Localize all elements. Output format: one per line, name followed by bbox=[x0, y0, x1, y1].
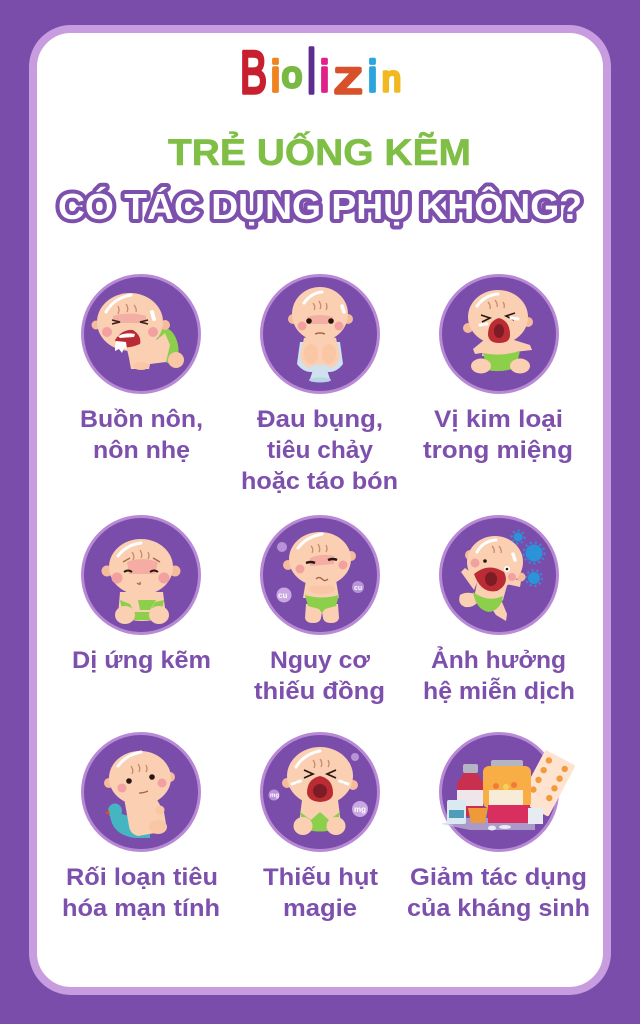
item 1: nausea: nôn nhẹ bbox=[93, 437, 190, 464]
label: Nguy cơ bbox=[270, 647, 371, 674]
icon: running baby with germs bbox=[440, 516, 558, 634]
item 5: copper deficiency bbox=[254, 516, 385, 705]
label: Thiếu hụt bbox=[263, 864, 378, 891]
icon: baby with copper bubbles bbox=[262, 516, 378, 634]
logo: Biolizin: i bbox=[271, 52, 280, 101]
label: Buồn nôn, bbox=[80, 406, 203, 433]
item 4: zinc allergy bbox=[72, 516, 211, 674]
item 5: copper deficiency: thiếu đồng bbox=[254, 678, 385, 705]
label: Vị kim loại bbox=[434, 406, 563, 433]
title line 1: TRẺ UỐNG KẼM bbox=[168, 131, 471, 173]
label: Dị ứng kẽm bbox=[72, 647, 211, 674]
label: Đau bụng, bbox=[257, 406, 383, 433]
logo: Biolizin bbox=[240, 38, 401, 107]
icon: crying baby with magnesium bubbles: mg bbox=[270, 793, 279, 799]
icon: baby with copper bubbles: cu bbox=[354, 585, 362, 592]
item 1: nausea bbox=[80, 276, 203, 464]
item 8: magnesium deficiency bbox=[262, 734, 378, 922]
item 2: stomach ache: tiêu chảy bbox=[267, 437, 374, 464]
logo: Biolizin: o bbox=[282, 54, 302, 95]
item 7: chronic digestive disorder: hóa mạn tính bbox=[62, 895, 220, 922]
icon: baby on duck potty bbox=[82, 734, 200, 850]
logo: Biolizin: B bbox=[240, 39, 267, 106]
icon: allergic baby bbox=[82, 516, 200, 634]
item 2: stomach ache: hoặc táo bón bbox=[241, 468, 398, 495]
item 7: chronic digestive disorder bbox=[62, 734, 220, 922]
item 2: stomach ache bbox=[241, 276, 398, 495]
icon: crying baby bbox=[440, 276, 558, 392]
icon: baby on toilet bbox=[262, 276, 378, 392]
item 6: immune system bbox=[423, 516, 575, 705]
icon: vomiting baby bbox=[82, 276, 200, 392]
item 3: metallic taste bbox=[423, 276, 573, 464]
logo: Biolizin: n bbox=[382, 58, 401, 99]
logo: Biolizin: l bbox=[307, 38, 316, 107]
label: Ảnh hưởng bbox=[431, 645, 566, 674]
logo: Biolizin: i bbox=[368, 52, 377, 101]
item 6: immune system: hệ miễn dịch bbox=[423, 677, 575, 705]
icon: crying baby with magnesium bubbles: mg bbox=[354, 805, 366, 814]
icon: medicines bbox=[440, 734, 576, 850]
icon: crying baby with magnesium bubbles bbox=[262, 734, 378, 850]
label: Rối loạn tiêu bbox=[66, 864, 218, 891]
item 9: reduced antibiotic effect bbox=[407, 734, 590, 922]
item 9: reduced antibiotic effect: của kháng sinh bbox=[407, 895, 590, 922]
logo: Biolizin: z bbox=[334, 51, 363, 103]
item 8: magnesium deficiency: magie bbox=[283, 895, 357, 922]
label: Giảm tác dụng bbox=[410, 864, 587, 891]
icon: baby with copper bubbles: cu bbox=[278, 591, 287, 600]
item 3: metallic taste: trong miệng bbox=[423, 437, 573, 464]
logo: Biolizin: i bbox=[320, 52, 329, 101]
title line 2: CÓ TÁC DỤNG PHỤ KHÔNG? bbox=[58, 185, 582, 227]
